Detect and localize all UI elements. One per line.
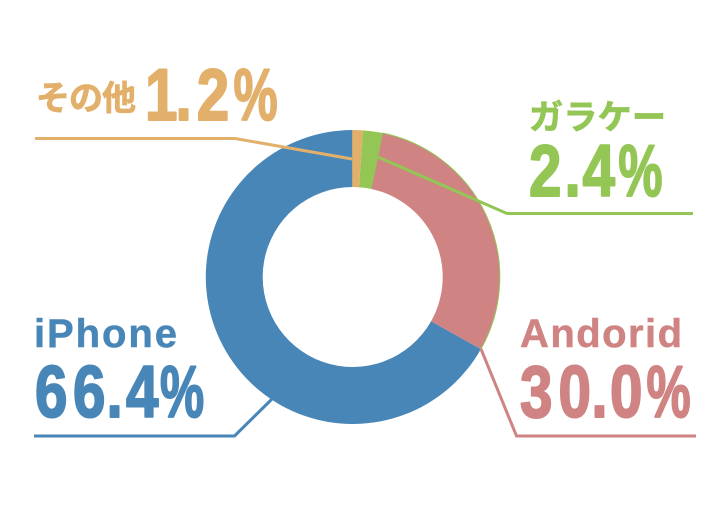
- value: other: 1.2: [145, 55, 229, 137]
- leader line: other: [35, 138, 352, 159]
- label: Android: [520, 312, 691, 434]
- leader line: garake: [378, 157, 693, 214]
- label name: iPhone: iPhone: [34, 312, 177, 356]
- value: iPhone: 66.4: [35, 352, 159, 434]
- label name: Android: Andorid: [520, 312, 682, 356]
- label name: garake: ガラケー: [529, 99, 666, 137]
- percent sign: Android: %: [646, 352, 691, 433]
- value: garake: 2.4: [529, 131, 615, 213]
- label: iPhone: [34, 312, 204, 434]
- donut chart: [206, 130, 500, 424]
- segment: other 1.2%: [352, 130, 363, 187]
- segment: garake 2.4%: [359, 130, 383, 189]
- segment: Android 30.0%: [371, 133, 500, 349]
- label: garake: [529, 99, 666, 213]
- segment: iPhone 66.4%: [206, 130, 481, 424]
- label name: other: その他: [36, 80, 136, 118]
- green edge on Android segment: [382, 133, 500, 349]
- percent sign: garake: %: [618, 131, 663, 212]
- leader line: iPhone: [34, 399, 272, 436]
- value: Android: 30.0: [520, 352, 642, 434]
- percent sign: iPhone: %: [160, 352, 204, 433]
- label: other: [36, 55, 278, 137]
- percent sign: other: %: [234, 55, 278, 136]
- leader line: Android: [481, 349, 696, 436]
